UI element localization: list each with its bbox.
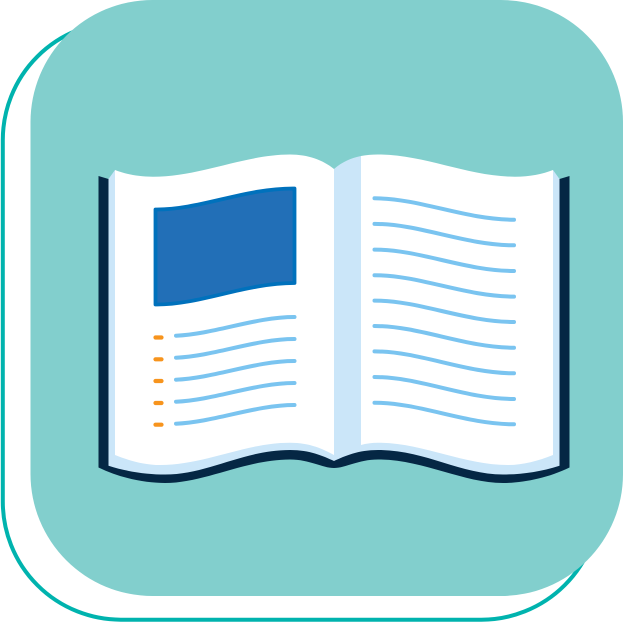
blue picture block (156, 188, 294, 305)
book (98, 154, 570, 483)
left white page (115, 154, 334, 465)
orange bullet dashes (156, 338, 162, 425)
left page text lines (176, 317, 294, 424)
right white page (361, 154, 553, 465)
light blue page edges and gutter (108, 156, 560, 474)
right page text lines (374, 198, 514, 424)
navy book cover (98, 176, 570, 483)
